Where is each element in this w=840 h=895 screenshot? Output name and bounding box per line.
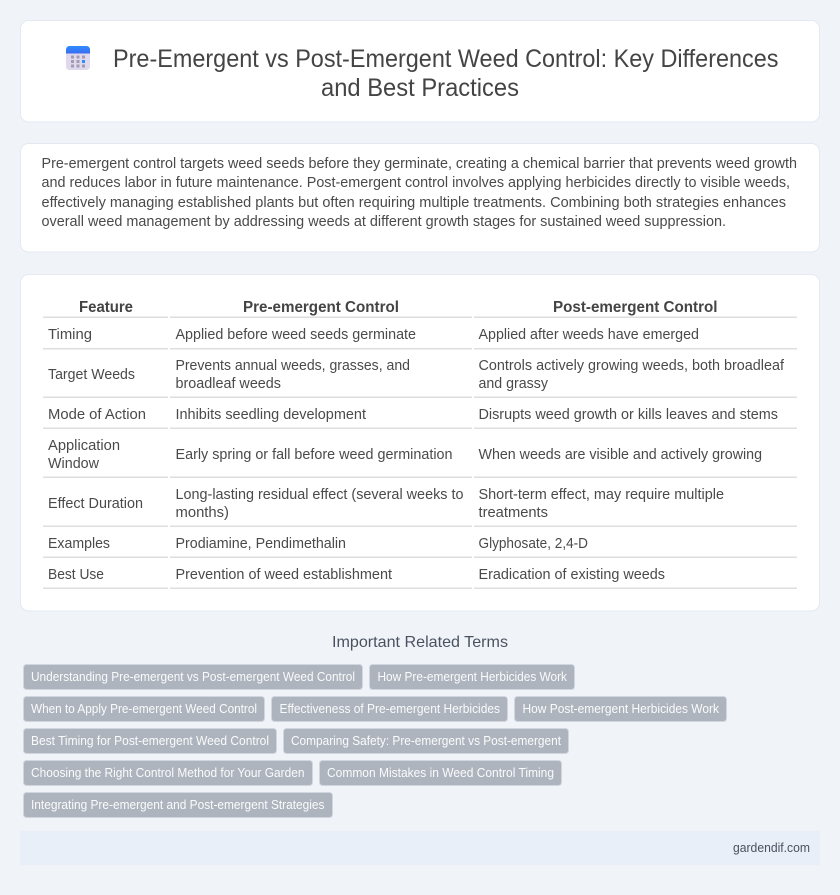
row: target weeds (48, 358, 785, 392)
panel: introduction text: effectively managing established plants but often requiring multiple treatments. Combining both strategies enhances (42, 195, 786, 211)
related term tags (24, 664, 726, 818)
row: target weeds: Target Weeds (48, 367, 135, 383)
tag (24, 760, 312, 786)
tag (370, 664, 574, 690)
row: application window: Early spring or fall before weed germination (176, 447, 452, 463)
panel: introduction text: and reduces labor in future maintenance. Post-emergent control involves applying herbicides directly to visible weeds, (42, 175, 790, 191)
row: target weeds: Controls actively growing weeds, both broadleaf (478, 358, 785, 374)
row: examples: Glyphosate, 2,4-D (478, 536, 588, 552)
footer bar (20, 831, 820, 865)
row: timing: Applied before weed seeds germinate (176, 327, 416, 343)
tag: Effectiveness of Pre-emergent Herbicides (280, 701, 500, 716)
table header row: Post-emergent Control (553, 299, 718, 316)
row: timing: Applied after weeds have emerged (478, 327, 699, 343)
tag: How Post-emergent Herbicides Work (522, 701, 720, 716)
row: application window: Application (48, 438, 120, 454)
header panel (20, 20, 820, 122)
row: best use: Prevention of weed establishment (176, 567, 392, 583)
row: effect duration: Long-lasting residual effect (several weeks to (176, 487, 464, 503)
row: effect duration: months) (176, 505, 229, 521)
row: timing (48, 327, 699, 343)
table header row: Feature (79, 299, 133, 316)
heading: important related terms: Important Related Terms (332, 634, 508, 651)
row: mode of action: Mode of Action (48, 407, 146, 423)
row: best use: Best Use (48, 567, 104, 583)
row: target weeds: Prevents annual weeds, grasses, and (176, 358, 410, 374)
table header row: Pre-emergent Control (243, 299, 399, 316)
tag (272, 696, 508, 722)
tag (320, 760, 562, 786)
row: examples: Prodiamine, Pendimethalin (176, 536, 346, 552)
tag: Comparing Safety: Pre-emergent vs Post-emergent (291, 733, 561, 748)
tag (24, 664, 362, 690)
footer bar: gardendif.com (733, 841, 810, 855)
row: mode of action (48, 407, 778, 423)
tag: Understanding Pre-emergent vs Post-emergent Weed Control (31, 669, 355, 684)
tag: Choosing the Right Control Method for Your Garden (31, 765, 304, 780)
panel: comparison table (20, 274, 820, 611)
row: effect duration (48, 487, 724, 521)
tag (24, 792, 332, 818)
tag: Common Mistakes in Weed Control Timing (327, 765, 554, 780)
title (113, 45, 778, 102)
row: application window: When weeds are visible and actively growing (478, 447, 762, 463)
tag (514, 696, 726, 722)
tag: Best Timing for Post-emergent Weed Control (31, 733, 269, 748)
row: timing: Timing (48, 327, 92, 343)
row: best use: Eradication of existing weeds (478, 567, 665, 583)
row: mode of action: Inhibits seedling development (176, 407, 366, 423)
row: application window: Window (48, 456, 100, 472)
tag: When to Apply Pre-emergent Weed Control (31, 701, 257, 716)
row: effect duration: treatments (478, 505, 548, 521)
row: effect duration: Short-term effect, may require multiple (478, 487, 724, 503)
tag: How Pre-emergent Herbicides Work (378, 669, 568, 684)
panel: introduction text: overall weed management by addressing weeds at different growth stages for sustained weed suppression. (42, 214, 726, 230)
tag (24, 728, 276, 754)
tag (284, 728, 568, 754)
tag (24, 696, 264, 722)
row: examples (48, 536, 588, 552)
title: and Best Practices (321, 74, 519, 102)
panel: introduction text: Pre-emergent control targets weed seeds before they germinate, creating a chemical barrier that prevents weed growth (42, 156, 797, 172)
icon: calendar (66, 46, 90, 70)
row: application window (48, 438, 762, 472)
row: target weeds: and grassy (478, 376, 549, 392)
row: best use (48, 567, 665, 583)
table header row (79, 299, 718, 316)
panel: introduction text (20, 144, 820, 252)
row: target weeds: broadleaf weeds (176, 376, 281, 392)
row: examples: Examples (48, 536, 110, 552)
row: effect duration: Effect Duration (48, 496, 143, 512)
row: mode of action: Disrupts weed growth or kills leaves and stems (478, 407, 778, 423)
title: Pre-Emergent vs Post-Emergent Weed Control: Key Differences (113, 45, 778, 73)
tag: Integrating Pre-emergent and Post-emergent Strategies (31, 797, 324, 812)
